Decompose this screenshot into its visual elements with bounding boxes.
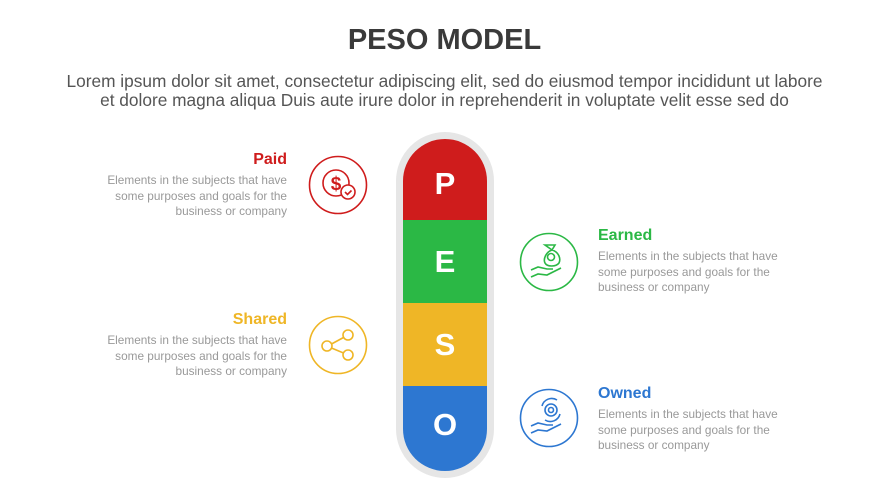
text: shared: some purposes and goals for the <box>115 349 287 363</box>
segment O <box>403 386 487 471</box>
subtitle: Lorem ipsum dolor sit amet, consectetur adipiscing elit, sed do eiusmod tempor incididunt ut labore <box>67 71 822 91</box>
text: paid <box>107 151 287 218</box>
text: earned: some purposes and goals for the <box>598 265 770 279</box>
icon: paid <box>308 156 368 214</box>
text: owned: Elements in the subjects that have <box>598 407 778 421</box>
text: paid: business or company <box>176 204 287 218</box>
pill: PESO column <box>396 132 494 478</box>
icon: shared <box>308 316 368 374</box>
segment E: E <box>435 244 455 279</box>
icon: paid: $ <box>331 174 342 195</box>
subtitle: et dolore magna aliqua Duis aute irure dolor in reprehenderit in voluptate velit esse sed do <box>100 90 789 110</box>
segment P: P <box>435 166 455 201</box>
text: earned: business or company <box>598 280 709 294</box>
icon: owned <box>520 388 578 448</box>
segment E <box>403 220 487 303</box>
text: owned: business or company <box>598 438 709 452</box>
text: earned: Elements in the subjects that have <box>598 249 778 263</box>
text: shared <box>107 311 287 378</box>
segment O: O <box>433 407 457 442</box>
segment S <box>403 303 487 386</box>
text: paid: some purposes and goals for the <box>115 189 287 203</box>
text: paid: Paid <box>253 151 287 168</box>
segment S: S <box>435 327 455 362</box>
text: earned: Earned <box>598 227 652 244</box>
text: owned: some purposes and goals for the <box>598 423 770 437</box>
text: shared: Elements in the subjects that have <box>107 333 287 347</box>
text: paid: Elements in the subjects that have <box>107 173 287 187</box>
text: owned <box>598 385 778 452</box>
text: shared: Shared <box>233 311 287 328</box>
subtitle <box>67 71 822 110</box>
text: owned: Owned <box>598 385 651 402</box>
segment P <box>403 139 487 220</box>
text: shared: business or company <box>176 364 287 378</box>
icon: earned <box>520 232 578 292</box>
text: earned <box>598 227 778 294</box>
title: PESO MODEL <box>348 24 541 56</box>
